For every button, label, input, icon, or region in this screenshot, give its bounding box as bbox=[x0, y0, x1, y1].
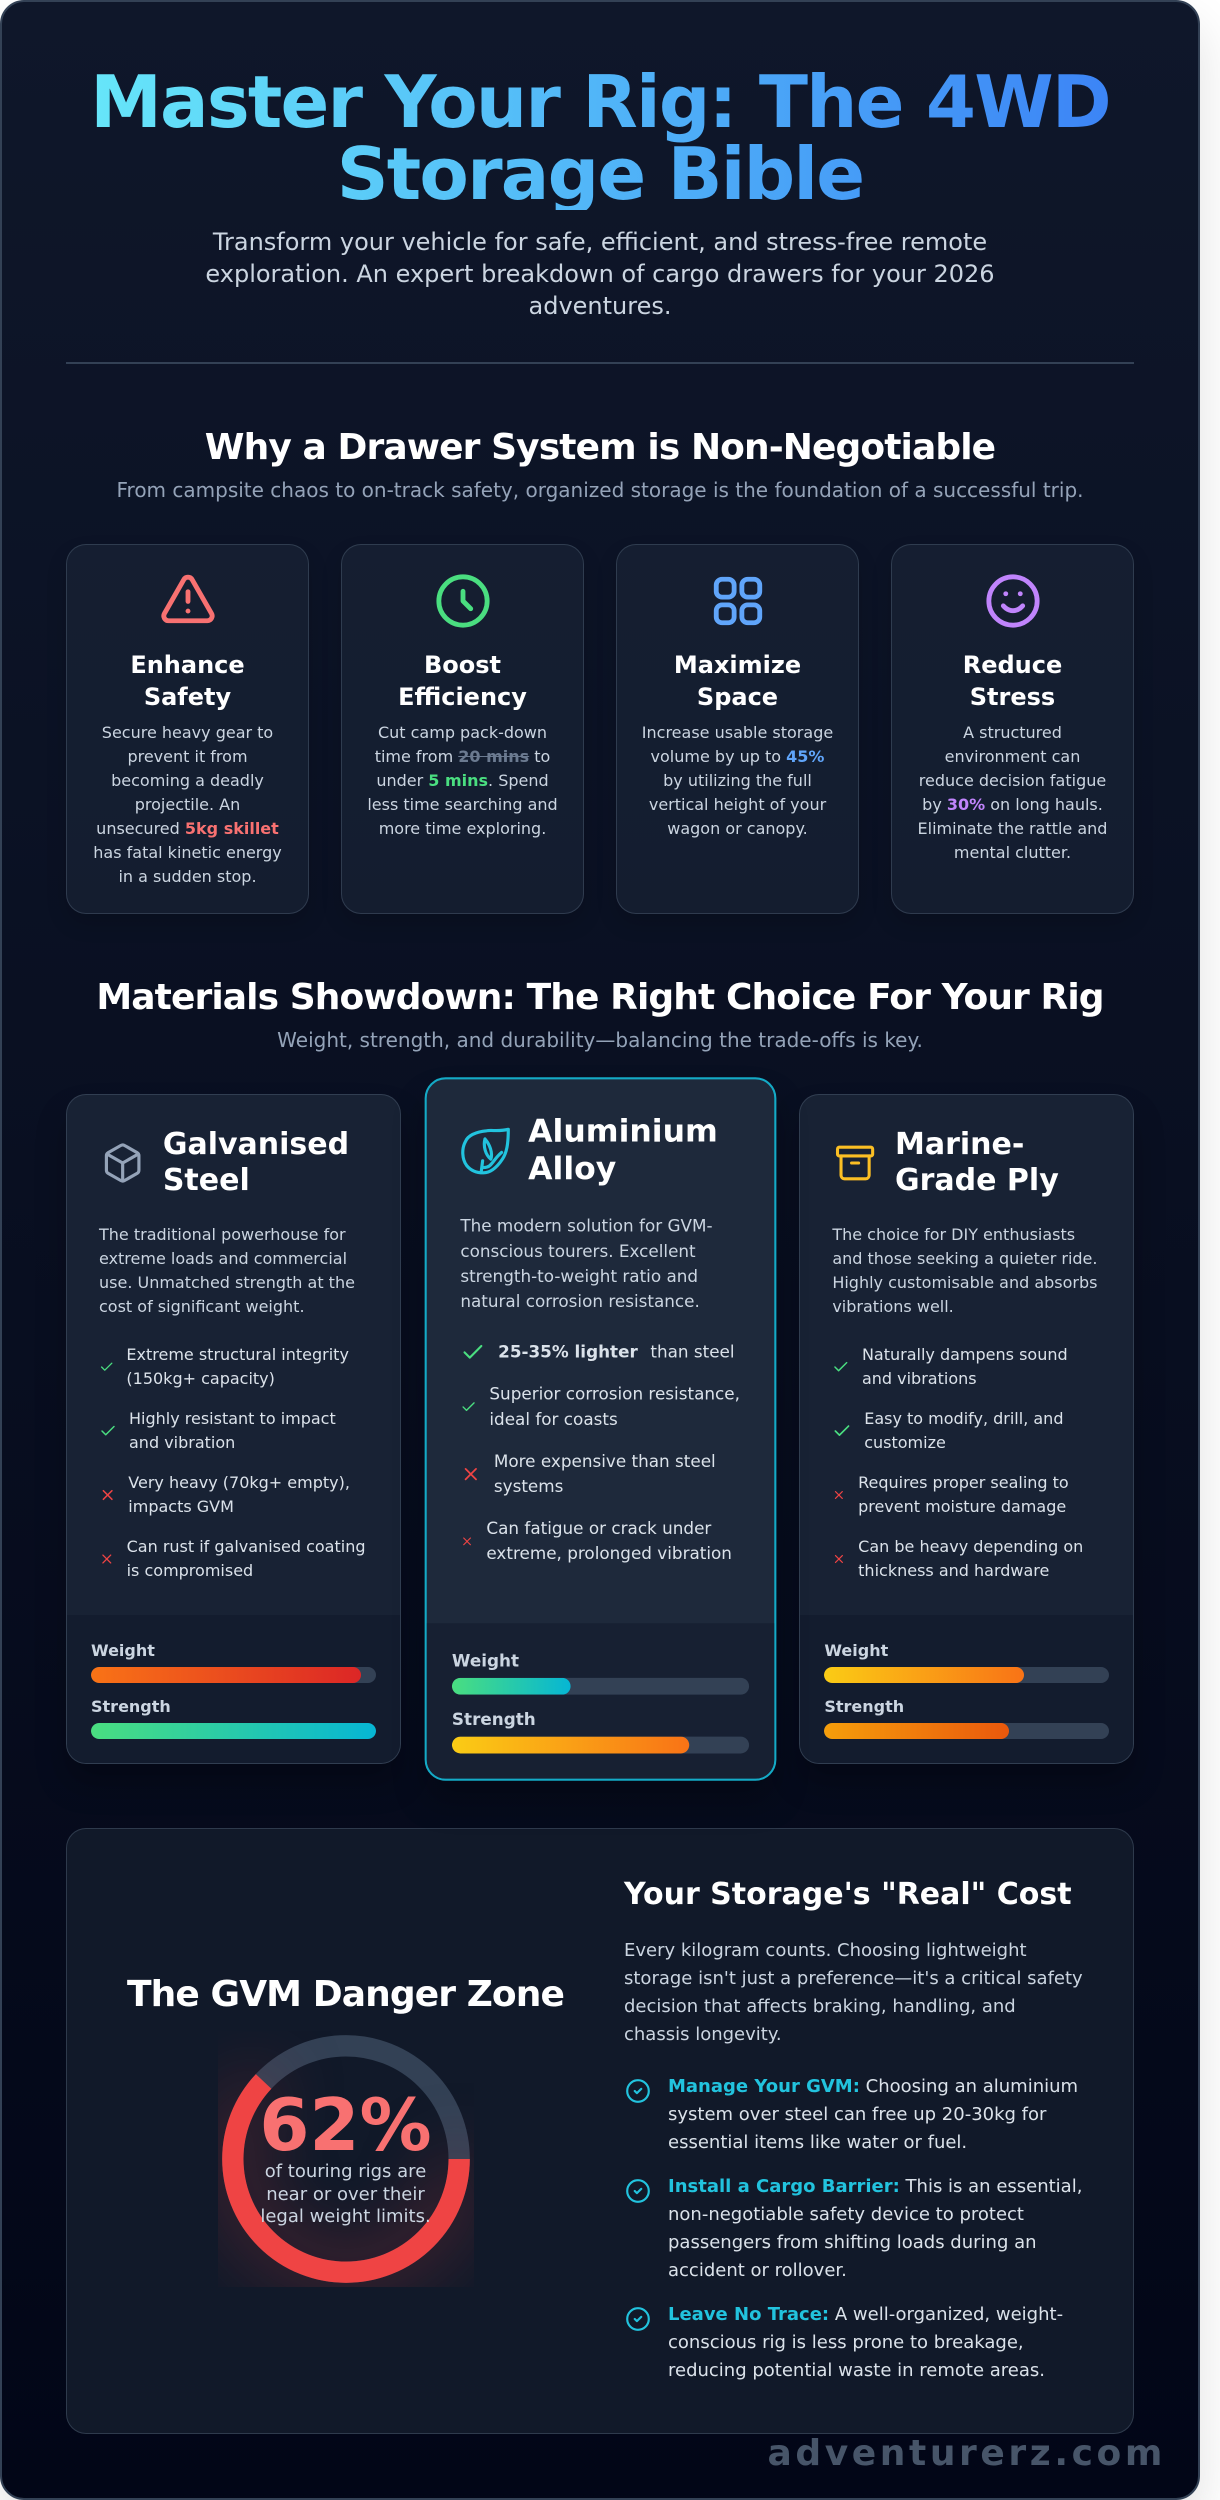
section subheading: Weight, strength, and durability—balancing the trade-offs is key. bbox=[277, 1028, 923, 1052]
heading: Your Storage's "Real" Cost bbox=[624, 1877, 1072, 1912]
column: real cost bbox=[624, 1877, 1083, 2381]
pros and cons list: Very heavy (70kg+ empty), impacts GVM bbox=[128, 1473, 350, 1516]
card title: Boost Efficiency bbox=[398, 651, 527, 711]
icon: clock bbox=[436, 574, 490, 628]
card: galvanised steel bbox=[66, 1094, 401, 1764]
tips list bbox=[626, 2076, 1082, 2381]
header bbox=[66, 66, 1134, 364]
description: The modern solution for GVM-conscious tourers. Excellent strength-to-weight ratio and natural corrosion resistance. bbox=[460, 1216, 712, 1311]
column: GVM danger zone bbox=[127, 1974, 564, 2287]
watermark: adventurerz.com bbox=[767, 2433, 1166, 2474]
pros and cons list: Extreme structural integrity (150kg+ capacity) bbox=[126, 1345, 349, 1388]
rating bars: Strength bbox=[91, 1697, 171, 1716]
icon: warning triangle bbox=[161, 574, 215, 624]
section subheading: From campsite chaos to on-track safety, organized storage is the foundation of a successful trip. bbox=[116, 478, 1084, 502]
heading: The GVM Danger Zone bbox=[127, 1974, 564, 2015]
pros and cons list: Superior corrosion resistance, ideal for coasts bbox=[489, 1384, 740, 1429]
card: enhance safety bbox=[66, 544, 309, 914]
panel: GVM danger zone and real cost bbox=[66, 1828, 1134, 2434]
card title: Reduce Stress bbox=[963, 651, 1062, 711]
heading: Materials Showdown: The Right Choice For Your Rig bbox=[96, 977, 1104, 1018]
card header bbox=[104, 1127, 349, 1198]
rating bars: Strength bbox=[452, 1709, 535, 1729]
description: The choice for DIY enthusiasts and those seeking a quieter ride. Highly customisable and absorbs vibrations well. bbox=[832, 1225, 1097, 1316]
rating bars: Weight bbox=[452, 1651, 519, 1670]
card header bbox=[461, 1113, 718, 1188]
icon: leaf bbox=[461, 1128, 510, 1174]
card header bbox=[836, 1127, 1059, 1198]
pros and cons list: Naturally dampens sound and vibrations bbox=[862, 1345, 1068, 1388]
icon: grid bbox=[714, 576, 762, 626]
panel: four benefit cards bbox=[66, 544, 1134, 914]
rating bars bbox=[426, 1623, 774, 1779]
card: reduce stress bbox=[891, 544, 1134, 914]
material name: Galvanised Steel bbox=[163, 1127, 349, 1198]
card text: A structured environment can reduce decision fatigue by 30% on long hauls. Eliminate the rattle and mental clutter. bbox=[918, 723, 1107, 862]
rating bars: Strength bbox=[824, 1697, 904, 1716]
paragraph: Every kilogram counts. Choosing lightweight storage isn't just a preference—it's a critical safety decision that affects braking, handling, and chassis longevity. bbox=[624, 1940, 1083, 2045]
pros and cons list: than steel bbox=[650, 1342, 734, 1362]
tips list: Leave No Trace: A well-organized, weight-conscious rig is less prone to breakage, reducing potential waste in remote areas. bbox=[668, 2304, 1063, 2381]
description: The traditional powerhouse for extreme loads and commercial use. Unmatched strength at the cost of significant weight. bbox=[99, 1225, 355, 1316]
pros and cons list bbox=[462, 1342, 740, 1563]
card body bbox=[832, 1127, 1097, 1580]
card: aluminium alloy (highlighted) bbox=[424, 1077, 776, 1781]
chart: 62% donut bbox=[218, 2035, 474, 2287]
pros and cons list: Easy to modify, drill, and customize bbox=[864, 1409, 1063, 1452]
card text: Increase usable storage volume by up to 45% by utilizing the full vertical height of your wagon or canopy. bbox=[642, 723, 833, 838]
card text: Cut camp pack-down time from 20 mins to under 5 mins. Spend less time searching and more time exploring. bbox=[367, 723, 558, 838]
card: boost efficiency bbox=[341, 544, 584, 914]
card: maximize space bbox=[616, 544, 859, 914]
donut label: of touring rigs are near or over their legal weight limits. bbox=[260, 2161, 431, 2227]
pros and cons list: More expensive than steel systems bbox=[494, 1451, 715, 1496]
donut label bbox=[259, 2083, 432, 2227]
icon: smile bbox=[986, 574, 1040, 628]
rating bars: Weight bbox=[91, 1641, 155, 1660]
card text: Secure heavy gear to prevent it from becoming a deadly projectile. An unsecured 5kg skillet has fatal kinetic energy in a sudden stop. bbox=[93, 723, 282, 886]
panel: material comparison cards bbox=[66, 1077, 1134, 1781]
section heading: materials showdown bbox=[96, 977, 1104, 1052]
pros and cons list: Can fatigue or crack under extreme, prolonged vibration bbox=[486, 1518, 732, 1563]
pros and cons list: Highly resistant to impact and vibration bbox=[129, 1409, 336, 1452]
pros and cons list: 25-35% lighter bbox=[498, 1342, 637, 1362]
icon: archive box bbox=[836, 1146, 874, 1180]
material name: Aluminium Alloy bbox=[528, 1113, 718, 1188]
material name: Marine-Grade Ply bbox=[895, 1127, 1059, 1198]
pros and cons list bbox=[834, 1345, 1083, 1580]
card body bbox=[460, 1113, 740, 1563]
heading: Why a Drawer System is Non-Negotiable bbox=[205, 427, 995, 468]
card title: Maximize Space bbox=[674, 651, 801, 711]
tips list: Install a Cargo Barrier: This is an essential, non-negotiable safety device to protect passengers from shifting loads during an accident or rollover. bbox=[668, 2176, 1082, 2281]
card: marine-grade ply bbox=[799, 1094, 1134, 1764]
pros and cons list: Requires proper sealing to prevent moisture damage bbox=[858, 1473, 1069, 1516]
icon: box bbox=[104, 1143, 140, 1183]
section heading: why a drawer system bbox=[116, 427, 1084, 502]
card title: Enhance Safety bbox=[130, 651, 245, 711]
pros and cons list: Can rust if galvanised coating is compromised bbox=[127, 1537, 365, 1580]
subtitle: Transform your vehicle for safe, efficient, and stress-free remote exploration. An expert breakdown of cargo drawers for your 2026 adventures. bbox=[205, 228, 995, 320]
rating bars: Weight bbox=[824, 1641, 888, 1660]
pros and cons list bbox=[100, 1345, 365, 1580]
card body bbox=[98, 1127, 365, 1580]
pros and cons list: Can be heavy depending on thickness and hardware bbox=[858, 1537, 1083, 1580]
title: Master Your Rig: The 4WD Storage Bible bbox=[90, 60, 1110, 216]
donut label: 62% bbox=[259, 2083, 432, 2167]
rating bars bbox=[800, 1615, 1133, 1763]
tips list: Manage Your GVM: Choosing an aluminium system over steel can free up 20-30kg for essential items like water or fuel. bbox=[668, 2076, 1078, 2153]
rating bars bbox=[67, 1615, 400, 1763]
